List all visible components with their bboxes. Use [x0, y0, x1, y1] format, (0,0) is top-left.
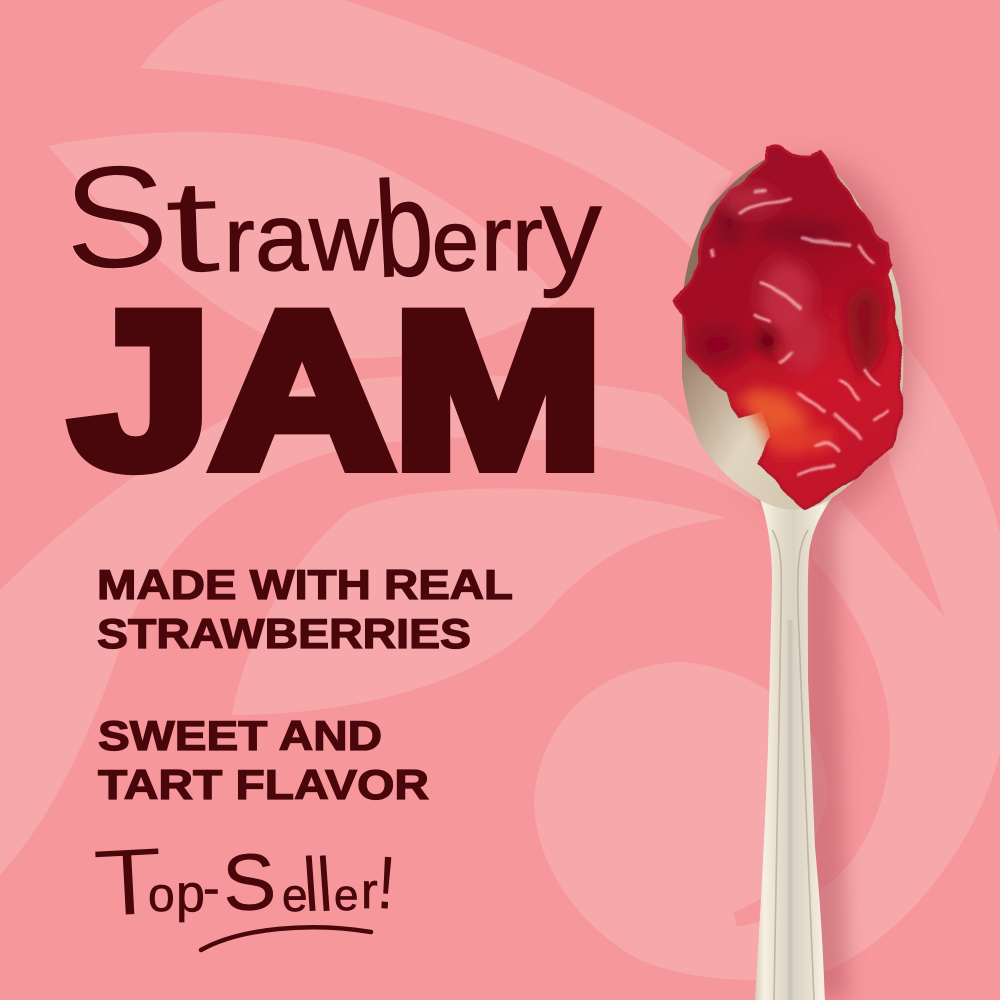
- script title: Strawberry: r: [481, 188, 512, 290]
- text block: made with real strawberries: MADE WITH REAL: [97, 561, 513, 608]
- script title: Strawberry: b: [372, 151, 437, 306]
- spoon handle: [755, 492, 832, 1000]
- script callout: Top-Seller!: o: [148, 869, 175, 922]
- script callout: Top-Seller!: -: [203, 860, 220, 916]
- script title: Strawberry: a: [255, 184, 309, 291]
- title: JAM: JAM: [71, 267, 603, 513]
- text block: sweet and tart flavor: [98, 712, 429, 808]
- script title: Strawberry: w: [308, 184, 379, 291]
- text block: sweet and tart flavor: TART FLAVOR: [98, 761, 429, 808]
- script callout: Top-Seller!: e: [334, 871, 358, 920]
- script callout: Top-Seller!: e: [282, 869, 308, 921]
- script title: Strawberry: S: [59, 133, 173, 302]
- script title: Strawberry: r: [224, 189, 255, 291]
- script callout: Top-Seller!: l: [299, 840, 322, 929]
- text block: made with real strawberries: STRAWBERRIES: [97, 610, 471, 657]
- jam shading: [692, 186, 883, 456]
- script callout: Top-Seller!: !: [373, 840, 400, 926]
- script title: Strawberry: [59, 133, 602, 306]
- spoon bowl: [682, 158, 903, 509]
- script callout: Top-Seller!: [90, 827, 400, 950]
- script title: Strawberry: r: [512, 188, 543, 290]
- script callout: Top-Seller!: T: [90, 827, 166, 938]
- script title: Strawberry: y: [540, 161, 602, 299]
- script callout: Top-Seller!: p: [176, 865, 205, 923]
- image: spoon of jam: [675, 144, 915, 1000]
- text block: sweet and tart flavor: SWEET AND: [98, 712, 382, 759]
- script callout: Top-Seller!: S: [220, 836, 278, 928]
- strawberry jam: [675, 144, 902, 507]
- script title: Strawberry: t: [162, 150, 223, 302]
- text block: made with real strawberries: [97, 561, 513, 657]
- jam highlights: [712, 190, 885, 475]
- script callout: Top-Seller!: r: [361, 863, 378, 919]
- spoon shadow: [715, 160, 915, 1000]
- script title: Strawberry: e: [432, 194, 479, 288]
- script callout: Top-Seller!: l: [313, 840, 336, 929]
